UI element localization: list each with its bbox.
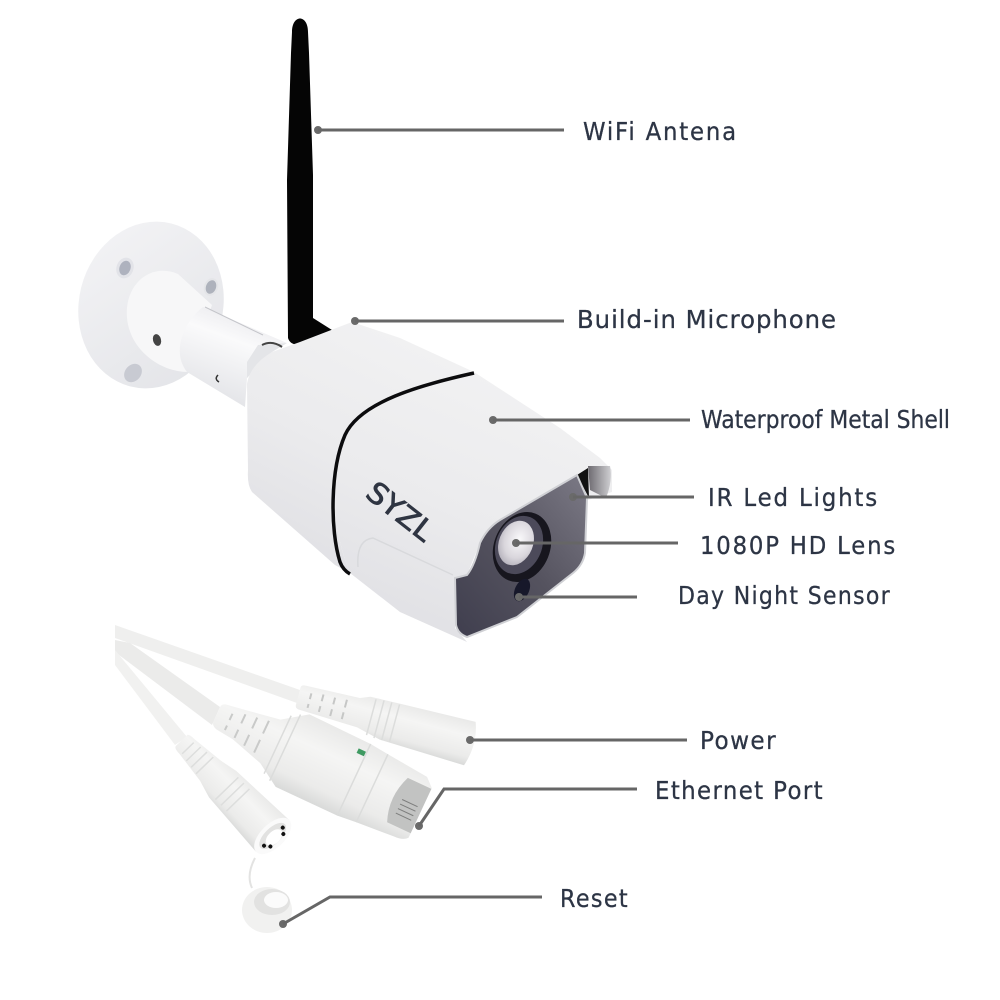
callout: wifi antena: WiFi Antena bbox=[583, 117, 738, 146]
hood metal strip bbox=[588, 466, 611, 498]
callout: microphone bbox=[351, 305, 837, 334]
callout: power bbox=[466, 726, 777, 755]
reset cap bbox=[242, 858, 292, 933]
callout: reset bbox=[279, 884, 629, 928]
sensor bbox=[511, 576, 533, 604]
cable 1 bbox=[115, 625, 300, 703]
callout: lens bbox=[512, 531, 897, 560]
rear housing bbox=[247, 322, 474, 573]
callout: ethernet port: Ethernet Port bbox=[655, 776, 824, 805]
callout: power: Power bbox=[700, 726, 777, 755]
icon: wifi antenna bbox=[287, 18, 332, 345]
callout: day night sensor bbox=[515, 581, 891, 610]
seam bbox=[333, 373, 474, 574]
callout: lens: 1080P HD Lens bbox=[700, 531, 897, 560]
callout: ir leds bbox=[569, 483, 879, 512]
cables and connectors bbox=[115, 625, 479, 933]
lens bbox=[483, 503, 561, 591]
front face bbox=[455, 475, 587, 637]
cable 3 bbox=[115, 650, 187, 745]
power connector bbox=[292, 676, 479, 766]
front panel line bbox=[358, 538, 453, 575]
front housing bbox=[335, 372, 612, 642]
callout: metal shell: Waterproof Metal Shell bbox=[701, 405, 950, 434]
dc plug bbox=[164, 725, 298, 861]
callout: ethernet port bbox=[415, 776, 824, 830]
camera body bbox=[247, 322, 612, 642]
callout: ir leds: IR Led Lights bbox=[708, 483, 879, 512]
cable 2 bbox=[115, 640, 220, 725]
callout: day night sensor: Day Night Sensor bbox=[678, 581, 891, 610]
callout: metal shell bbox=[489, 405, 950, 434]
ethernet connector bbox=[200, 679, 438, 847]
icon: wall mount and arm bbox=[61, 206, 287, 407]
callout: microphone: Build-in Microphone bbox=[577, 305, 837, 334]
logo: SYZL bbox=[360, 475, 441, 548]
callout: reset: Reset bbox=[560, 884, 629, 913]
callout: wifi antena bbox=[314, 117, 738, 146]
